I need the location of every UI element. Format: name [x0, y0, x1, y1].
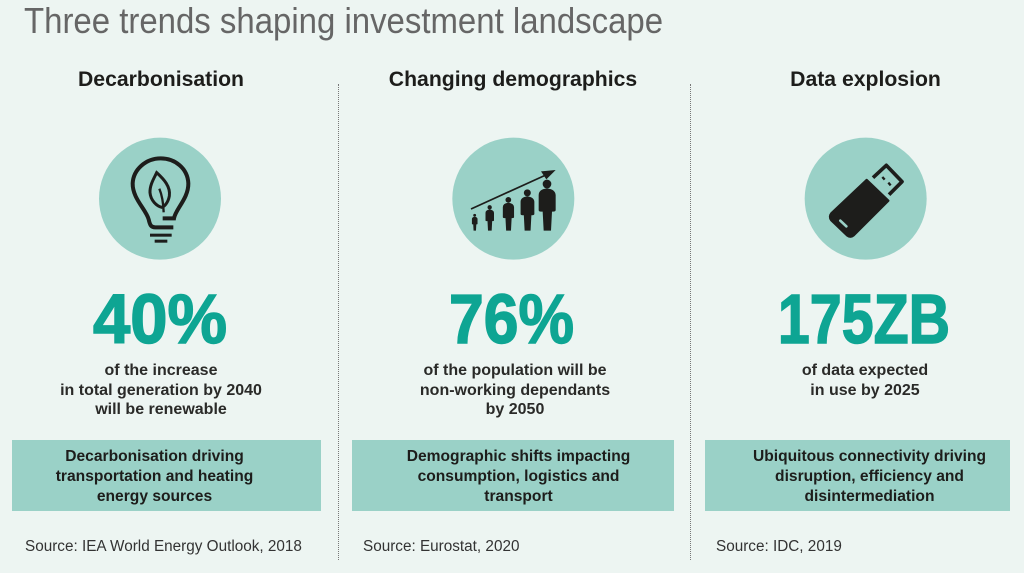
- icon: USB stick: [804, 138, 927, 260]
- callout box: [12, 440, 321, 511]
- heading: changing demographics: Changing demographics: [389, 68, 637, 91]
- callout box: [705, 440, 1010, 511]
- callout text: Decarbonisation driving: [65, 448, 244, 465]
- panel: data explosion: [705, 68, 1010, 555]
- description: by 2050: [486, 401, 544, 418]
- callout text: [407, 448, 630, 505]
- description: of the population will be: [423, 362, 607, 379]
- callout text: consumption, logistics and: [418, 468, 619, 485]
- description: in total generation by 2040: [60, 382, 262, 398]
- source: Source: IEA World Energy Outlook, 2018: [25, 538, 302, 555]
- icon: growing people with arrow: [452, 138, 574, 260]
- description: will be renewable: [95, 401, 227, 418]
- description: in use by 2025: [810, 382, 920, 398]
- callout text: Demographic shifts impacting: [407, 448, 630, 465]
- callout text: disruption, efficiency and: [775, 468, 964, 485]
- source: Source: Eurostat, 2020: [363, 538, 519, 555]
- callout box: [352, 440, 674, 511]
- callout text: transport: [484, 488, 553, 505]
- description: [420, 362, 610, 418]
- stat: 175ZB: 175ZB: [778, 280, 950, 358]
- panel: decarbonisation: [12, 68, 321, 555]
- callout text: transportation and heating: [56, 468, 253, 485]
- heading: decarbonisation: Decarbonisation: [78, 68, 244, 91]
- description: of the increase: [105, 362, 217, 379]
- callout text: disintermediation: [805, 488, 934, 505]
- description: [802, 362, 928, 398]
- source: Source: IDC, 2019: [716, 538, 842, 555]
- callout text: [753, 448, 986, 505]
- stat: 76%: 76%: [449, 280, 574, 358]
- callout text: [56, 448, 253, 505]
- stat: 40%: 40%: [93, 280, 227, 358]
- title: Three trends shaping investment landscape: [24, 0, 663, 41]
- description: of data expected: [802, 362, 928, 379]
- heading: data explosion: Data explosion: [790, 68, 941, 91]
- panel: changing demographics: [352, 68, 674, 555]
- callout text: energy sources: [97, 488, 212, 505]
- description: non-working dependants: [420, 382, 610, 398]
- description: [60, 362, 262, 418]
- callout text: Ubiquitous connectivity driving: [753, 448, 986, 465]
- icon: light bulb with leaf: [99, 138, 221, 260]
